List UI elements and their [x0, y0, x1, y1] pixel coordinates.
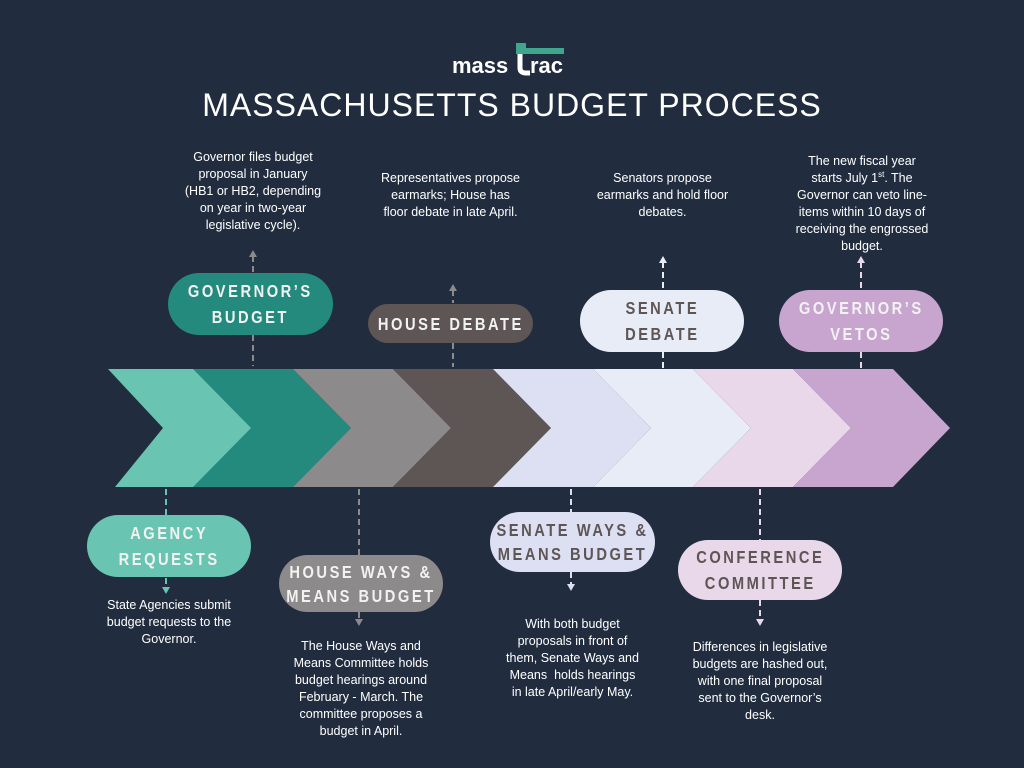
text: senate debate: earmarks and hold floor [597, 188, 728, 202]
pill: senate debate: SENATE [625, 298, 699, 318]
text: house ways and means: February - March. The [299, 690, 423, 704]
title: MASSACHUSETTS BUDGET PROCESS [202, 87, 822, 123]
text: house ways and means: Means Committee holds [294, 656, 428, 670]
text: conference committee: budgets are hashed out, [693, 657, 827, 671]
text: senate ways and means: in late April/early May. [512, 685, 633, 699]
pill: house debate: HOUSE DEBATE [378, 314, 523, 334]
text: conference committee: desk. [745, 708, 775, 722]
pill: house ways and means: HOUSE WAYS & [289, 562, 433, 582]
pill: governor's budget [168, 273, 333, 335]
text: governor's budget: on year in two-year [200, 201, 306, 215]
pill: senate ways and means: MEANS BUDGET [498, 544, 647, 564]
text: house ways and means: committee proposes a [300, 707, 422, 721]
text: senate ways and means [506, 617, 639, 699]
text: house ways and means: budget hearings around [295, 673, 427, 687]
pill: governor's budget: GOVERNOR’S [188, 281, 313, 301]
text: governor's vetos: starts July 1st. The [811, 170, 913, 185]
text: house ways and means [294, 639, 428, 738]
pill: senate ways and means: SENATE WAYS & [496, 520, 649, 540]
pill: house ways and means: MEANS BUDGET [286, 586, 436, 606]
pill: senate debate [580, 290, 744, 352]
pill: governor's vetos [779, 290, 943, 352]
pill: governor's budget: BUDGET [212, 307, 289, 327]
pill: governor's vetos: GOVERNOR’S [799, 298, 923, 318]
text: governor's budget [185, 150, 321, 232]
text: senate ways and means: With both budget [525, 617, 620, 631]
pill: conference committee [678, 540, 842, 600]
pill: house ways and means [279, 555, 443, 612]
text: senate debate [597, 171, 728, 219]
pill: agency requests: REQUESTS [118, 549, 220, 569]
pill: governor's vetos: VETOS [830, 324, 892, 344]
pill: house debate [368, 304, 533, 343]
text: senate ways and means: proposals in front of [518, 634, 627, 648]
text: agency requests: State Agencies submit [107, 598, 231, 612]
text: senate debate: Senators propose [613, 171, 712, 185]
text: conference committee: with one final proposal [698, 674, 822, 688]
text: governor's vetos: budget. [841, 239, 883, 253]
text: governor's vetos: Governor can veto line- [797, 188, 927, 202]
text: governor's budget: proposal in January [198, 167, 308, 181]
text: agency requests: Governor. [142, 632, 196, 646]
text: conference committee [693, 640, 827, 722]
text: governor's vetos: items within 10 days of [799, 205, 925, 219]
text: house debate: Representatives propose [381, 171, 520, 185]
text: agency requests: budget requests to the [107, 615, 231, 629]
text: senate debate: debates. [639, 205, 686, 219]
text: house debate [381, 171, 520, 219]
text: conference committee: sent to the Governor’s [698, 691, 822, 705]
text: governor's vetos [796, 154, 928, 253]
text: house ways and means: The House Ways and [301, 639, 421, 653]
text: senate ways and means: them, Senate Ways and [506, 651, 639, 665]
logo [452, 43, 564, 76]
text: conference committee: Differences in legislative [693, 640, 827, 654]
pill: agency requests [87, 515, 251, 577]
text: house debate: earmarks; House has [391, 188, 510, 202]
text: governor's budget: Governor files budget [193, 150, 313, 164]
pill: agency requests: AGENCY [130, 523, 208, 543]
text: house debate: floor debate in late April. [383, 205, 518, 219]
pill: conference committee: CONFERENCE [696, 547, 824, 567]
pill: conference committee: COMMITTEE [705, 573, 815, 593]
text: agency requests [107, 598, 231, 646]
text: senate ways and means: Means holds hearings [510, 668, 635, 682]
pill: senate ways and means [490, 512, 655, 572]
text: governor's vetos: The new fiscal year [808, 154, 916, 168]
pill: senate debate: DEBATE [625, 324, 699, 344]
text: governor's vetos: receiving the engrossed [796, 222, 928, 236]
text: governor's budget: legislative cycle). [206, 218, 300, 232]
text: governor's budget: (HB1 or HB2, depending [185, 184, 321, 198]
text: house ways and means: budget in April. [320, 724, 402, 738]
